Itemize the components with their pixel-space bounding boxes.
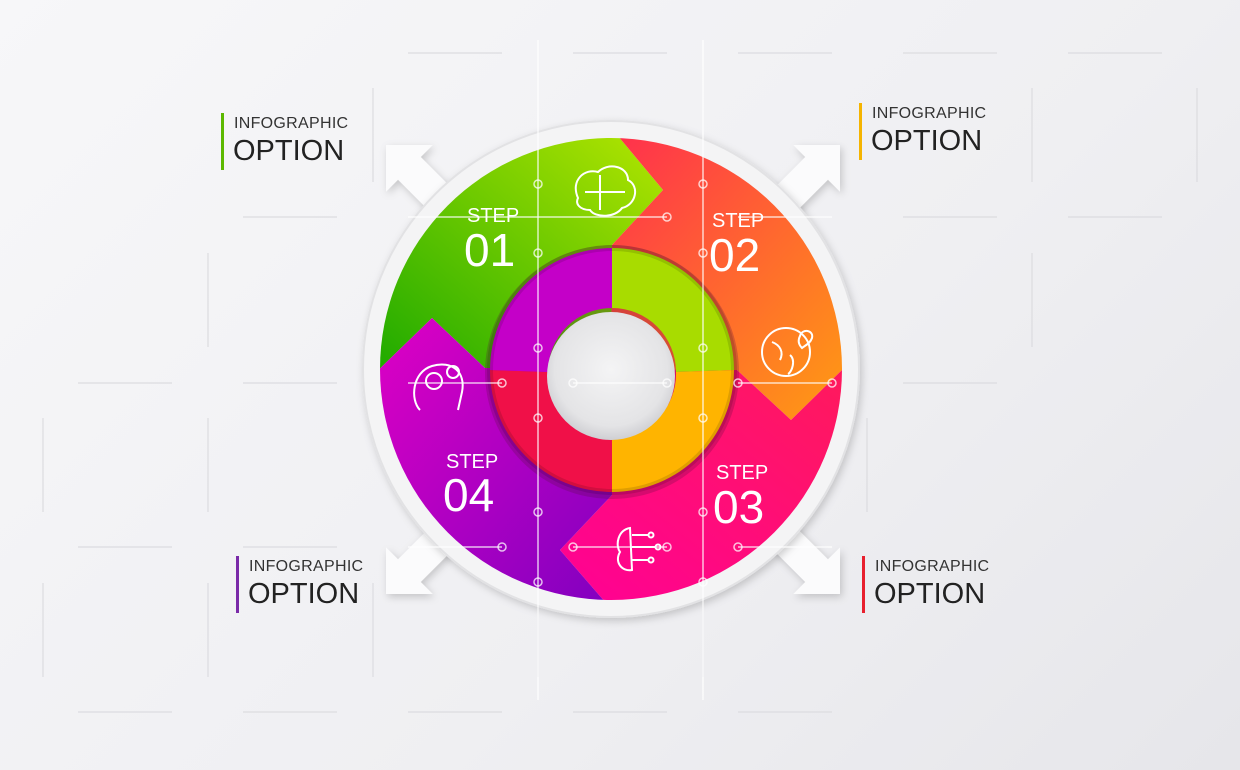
step 01 text: 01 <box>464 224 515 276</box>
arrows: four diagonal white arrows <box>363 122 863 617</box>
segment: step 03 pink <box>560 370 842 600</box>
step 03 text: STEP <box>716 462 768 484</box>
label: top-right option: OPTION <box>871 125 982 157</box>
cycle diagram <box>360 40 866 700</box>
label: bottom-right option: INFOGRAPHIC <box>875 558 989 575</box>
label: top-right option <box>859 103 986 160</box>
step 02 text <box>709 210 764 281</box>
icon: puzzle brain <box>576 166 635 216</box>
label: bottom-right option: OPTION <box>874 578 985 610</box>
white base disc <box>363 121 859 617</box>
label: top-right option: INFOGRAPHIC <box>872 105 986 122</box>
overlay connector lines <box>408 40 836 700</box>
label: bottom-left option: INFOGRAPHIC <box>249 558 363 575</box>
step 02 text: STEP <box>712 210 764 232</box>
label: top-left option: OPTION <box>233 135 344 167</box>
label: top-left option: INFOGRAPHIC <box>234 115 348 132</box>
inner swirl <box>485 245 739 499</box>
label: bottom-left option: OPTION <box>248 578 359 610</box>
step 01 text: STEP <box>467 205 519 227</box>
label: bottom-right option <box>862 556 989 613</box>
icon: digital brain <box>618 528 660 570</box>
label: bottom-left option <box>236 556 363 613</box>
step 03 text <box>713 462 768 533</box>
step 04 text: 04 <box>443 469 494 521</box>
step 02 text: 02 <box>709 229 760 281</box>
step 04 text: STEP <box>446 451 498 473</box>
colored ring segments <box>370 130 860 610</box>
segment: step 02 red-orange <box>611 130 860 420</box>
label: top-left option <box>221 113 348 170</box>
step 03 text: 03 <box>713 481 764 533</box>
step 04 text <box>443 451 498 521</box>
step 01 text <box>464 205 519 276</box>
segment: step 01 green <box>380 138 663 368</box>
icon: head with gears <box>414 364 463 410</box>
icon: globe with heart <box>762 328 812 376</box>
segment: step 04 purple <box>370 318 612 610</box>
